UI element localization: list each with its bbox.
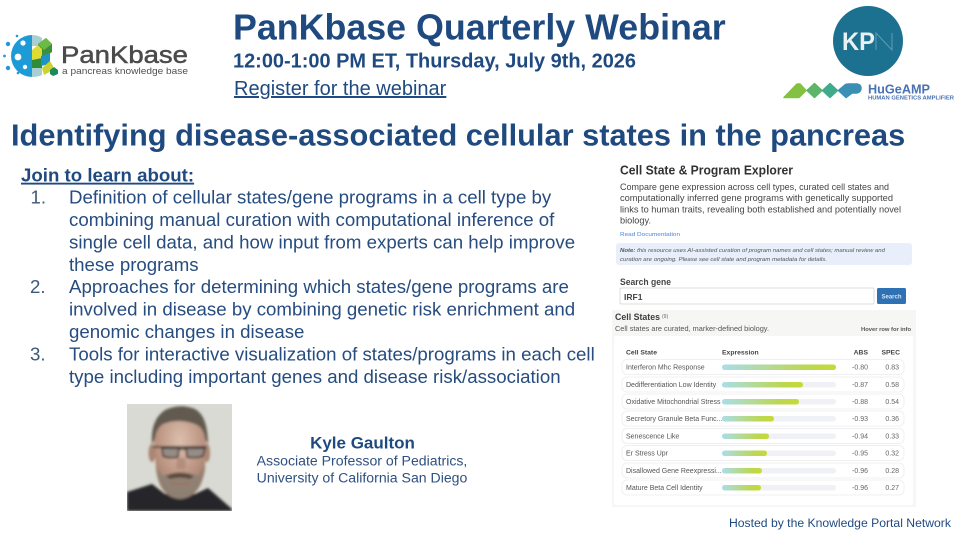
search input: IRF1 [624,292,643,302]
register link: Register for the webinar [234,78,447,100]
table header: SPEC [881,350,900,356]
item 2: Approaches for determining which states/gene programs are [69,276,569,297]
row: Disallowed Gene Reexpressi: Disallowed Gene Reexpressi... [626,468,722,475]
item 1 [30,186,575,275]
row: Oxidative Mitochondrial Stress [622,394,904,409]
panel description: computationally inferred gene programs with genetically supported [620,193,893,204]
row: Oxidative Mitochondrial Stress: Oxidative Mitochondrial Stress [626,399,721,406]
main heading: Identifying disease-associated cellular states in the pancreas [11,118,905,153]
HuGeAMP logo [784,82,954,102]
row: Dedifferentiation Low Identity: 0.58 [885,382,899,389]
row: Senescence Like: 0.33 [885,434,899,440]
item 1: these programs [69,254,199,275]
cell states heading: Cell States [615,312,660,323]
search button [877,288,906,304]
panel description [620,182,901,226]
logo subtitle: HUMAN GENETICS AMPLIFIER [868,96,954,102]
item 3 [30,343,595,387]
item 3: 3. [30,343,46,364]
learning points [21,165,595,387]
panel background [612,310,916,507]
row: Interferon Mhc Response: -0.80 [852,364,868,372]
item 1: 1. [30,186,46,208]
search button: Search [881,294,902,300]
row: Secretory Granule Beta Func: -0.93 [852,416,868,423]
note box: Note: this resource uses AI-assisted curation of program names and cell states; manual review and [620,248,886,254]
table card [614,336,913,505]
row: Interferon Mhc Response [622,360,904,374]
speaker name: Kyle Gaulton [310,433,415,452]
row: Senescence Like [622,428,904,444]
row: Mature Beta Cell Identity [622,480,904,495]
row: Dedifferentiation Low Identity [622,377,904,392]
row: Senescence Like: Senescence Like [626,434,679,440]
cell count: (9) [662,314,668,320]
table header [626,350,900,356]
search input [620,288,874,304]
table header: ABS [854,350,868,356]
speaker details [257,433,468,485]
item 1: Definition of cellular states/gene programs in a cell type by [69,186,552,208]
item 2: involved in disease by combining genetic risk enrichment and [69,299,575,320]
row: Disallowed Gene Reexpressi: -0.96 [852,468,868,475]
logo thin letter N [876,33,892,50]
row: Secretory Granule Beta Func [622,411,904,426]
row: Interferon Mhc Response: 0.83 [885,364,899,372]
logo tagline: a pancreas knowledge base [62,66,188,77]
row: Mature Beta Cell Identity: Mature Beta Cell Identity [626,485,703,492]
item 3: type including important genes and disease risk/association [69,366,561,387]
panel heading: Cell State & Program Explorer [620,162,793,178]
row: Senescence Like: -0.94 [852,434,868,440]
row: Secretory Granule Beta Func: 0.36 [885,416,899,423]
row: Secretory Granule Beta Func: Secretory Granule Beta Func... [626,416,723,423]
row: Disallowed Gene Reexpressi: 0.28 [885,468,899,475]
note box [616,243,912,265]
logo wordmark: PanKbase [61,42,188,69]
panel: Cell State and Program Explorer screenshot [612,162,916,507]
note box: curation are ongoing. Please see cell state and program metadata for details. [620,257,827,263]
row: Interferon Mhc Response: Interferon Mhc Response [626,364,705,372]
row: Disallowed Gene Reexpressi [622,463,904,478]
row: Er Stress Upr [622,446,904,460]
speaker photo [127,404,232,511]
table header: Expression [722,350,759,356]
host credit: Hosted by the Knowledge Portal Network [729,516,952,530]
list heading: Join to learn about: [21,165,194,186]
item 1: single cell data, and how input from experts can help improve [69,231,575,252]
logo letters: KP [842,28,875,56]
logo shapes [784,84,861,98]
row: Mature Beta Cell Identity: 0.27 [885,485,899,492]
panel description: links to human traits, revealing both established and potentially novel [620,204,901,216]
row: Oxidative Mitochondrial Stress: -0.88 [852,399,868,406]
speaker role: Associate Professor of Pediatrics, [257,453,467,469]
hover hint: Hover row for info [861,327,911,333]
item 2 [30,276,575,342]
title: PanKbase Quarterly Webinar [233,8,726,48]
item 1: combining manual curation with computational inference of [69,209,555,230]
PanKbase logo [3,35,188,77]
item 3: Tools for interactive visualization of states/programs in each cell [69,343,595,364]
search label: Search gene [620,277,671,287]
speaker affiliation: University of California San Diego [257,469,468,485]
item 2: genomic changes in disease [69,321,304,342]
row: Er Stress Upr: -0.95 [852,450,868,458]
row: Er Stress Upr: 0.32 [885,450,899,458]
row: Mature Beta Cell Identity: -0.96 [852,485,868,492]
logo name: HuGeAMP [868,82,930,96]
table header: Cell State [626,350,657,356]
row: Dedifferentiation Low Identity: Dedifferentiation Low Identity [626,382,717,389]
documentation link: Read Documentation [620,232,680,238]
row: Dedifferentiation Low Identity: -0.87 [852,382,868,389]
logo circle [833,6,903,76]
item 2: 2. [30,276,46,297]
row: Oxidative Mitochondrial Stress: 0.54 [885,399,899,406]
date and time: 12:00-1:00 PM ET, Thursday, July 9th, 2026 [233,50,636,72]
icon: pancreas cube sphere [3,35,58,77]
cell states description: Cell states are curated, marker-defined biology. [615,324,769,333]
panel description: biology. [620,216,651,226]
KPN logo [833,6,903,76]
row: Er Stress Upr: Er Stress Upr [626,450,669,458]
panel description: Compare gene expression across cell types, curated cell states and [620,182,889,193]
